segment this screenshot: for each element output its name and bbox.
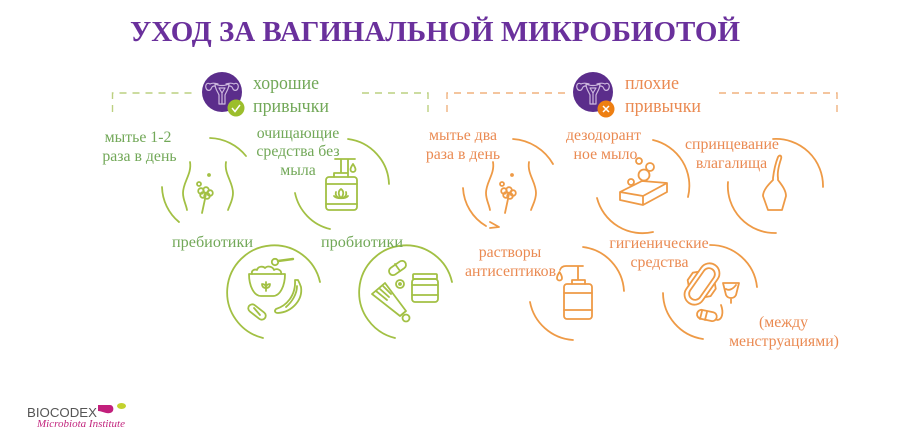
item: antiseptic solutions: антисептиков: [465, 263, 556, 280]
heading: bad habits: плохие: [625, 73, 679, 94]
item: prebiotics: [172, 234, 320, 338]
item: washing twice a day: раза в день: [426, 146, 500, 163]
logo: Biocodex Microbiota Institute: BIOCODEX: [27, 406, 98, 420]
logo: Biocodex Microbiota Institute: Microbiota Institute: [36, 419, 126, 430]
item: probiotics: пробиотики: [321, 234, 404, 251]
item: deodorant soap: дезодорант: [566, 127, 641, 144]
item: hygiene products: средства: [631, 254, 688, 271]
item: soap-free cleansers: очищающие: [257, 125, 339, 142]
item: washing twice a day: мытье два: [429, 127, 497, 144]
heading: good habits: привычки: [253, 96, 329, 117]
panel: bad habits: [426, 72, 839, 350]
panel: good habits: [102, 72, 452, 338]
item: probiotics: [321, 234, 452, 338]
icon: uterus with cross badge: [573, 72, 614, 118]
item: soap-free cleansers: средства без: [256, 143, 340, 160]
item: washing 1-2 times a day: [102, 129, 246, 222]
item: antiseptic solutions: растворы: [479, 244, 542, 261]
item: washing twice a day: [426, 127, 553, 228]
logo: Biocodex Microbiota Institute: [27, 403, 126, 430]
heading: bad habits: привычки: [625, 96, 701, 117]
item: prebiotics: пребиотики: [172, 234, 254, 251]
icon: uterus with check badge: [202, 72, 244, 116]
item: deodorant soap: [566, 127, 689, 233]
item: vaginal douching: [685, 136, 823, 233]
item: soap-free cleansers: мыла: [280, 162, 316, 179]
item: antiseptic solutions: [465, 244, 624, 340]
title: УХОД ЗА ВАГИНАЛЬНОЙ МИКРОБИОТОЙ: [130, 15, 740, 48]
item: vaginal douching: спринцевание: [685, 136, 779, 153]
item: washing 1-2 times a day: мытье 1-2: [105, 129, 171, 146]
item: washing 1-2 times a day: раза в день: [102, 148, 177, 165]
note: between periods: (между: [759, 314, 808, 331]
item: hygiene products: [609, 235, 839, 350]
item: deodorant soap: ное мыло: [574, 146, 638, 163]
item: soap-free cleansers: [256, 125, 389, 229]
heading: good habits: хорошие: [253, 73, 319, 94]
bracket: bad habits: [447, 93, 837, 112]
item: hygiene products: гигиенические: [609, 235, 709, 252]
item: vaginal douching: влагалища: [696, 155, 767, 172]
note: between periods: менструациями): [729, 333, 839, 350]
bracket: good habits: [112, 93, 428, 112]
